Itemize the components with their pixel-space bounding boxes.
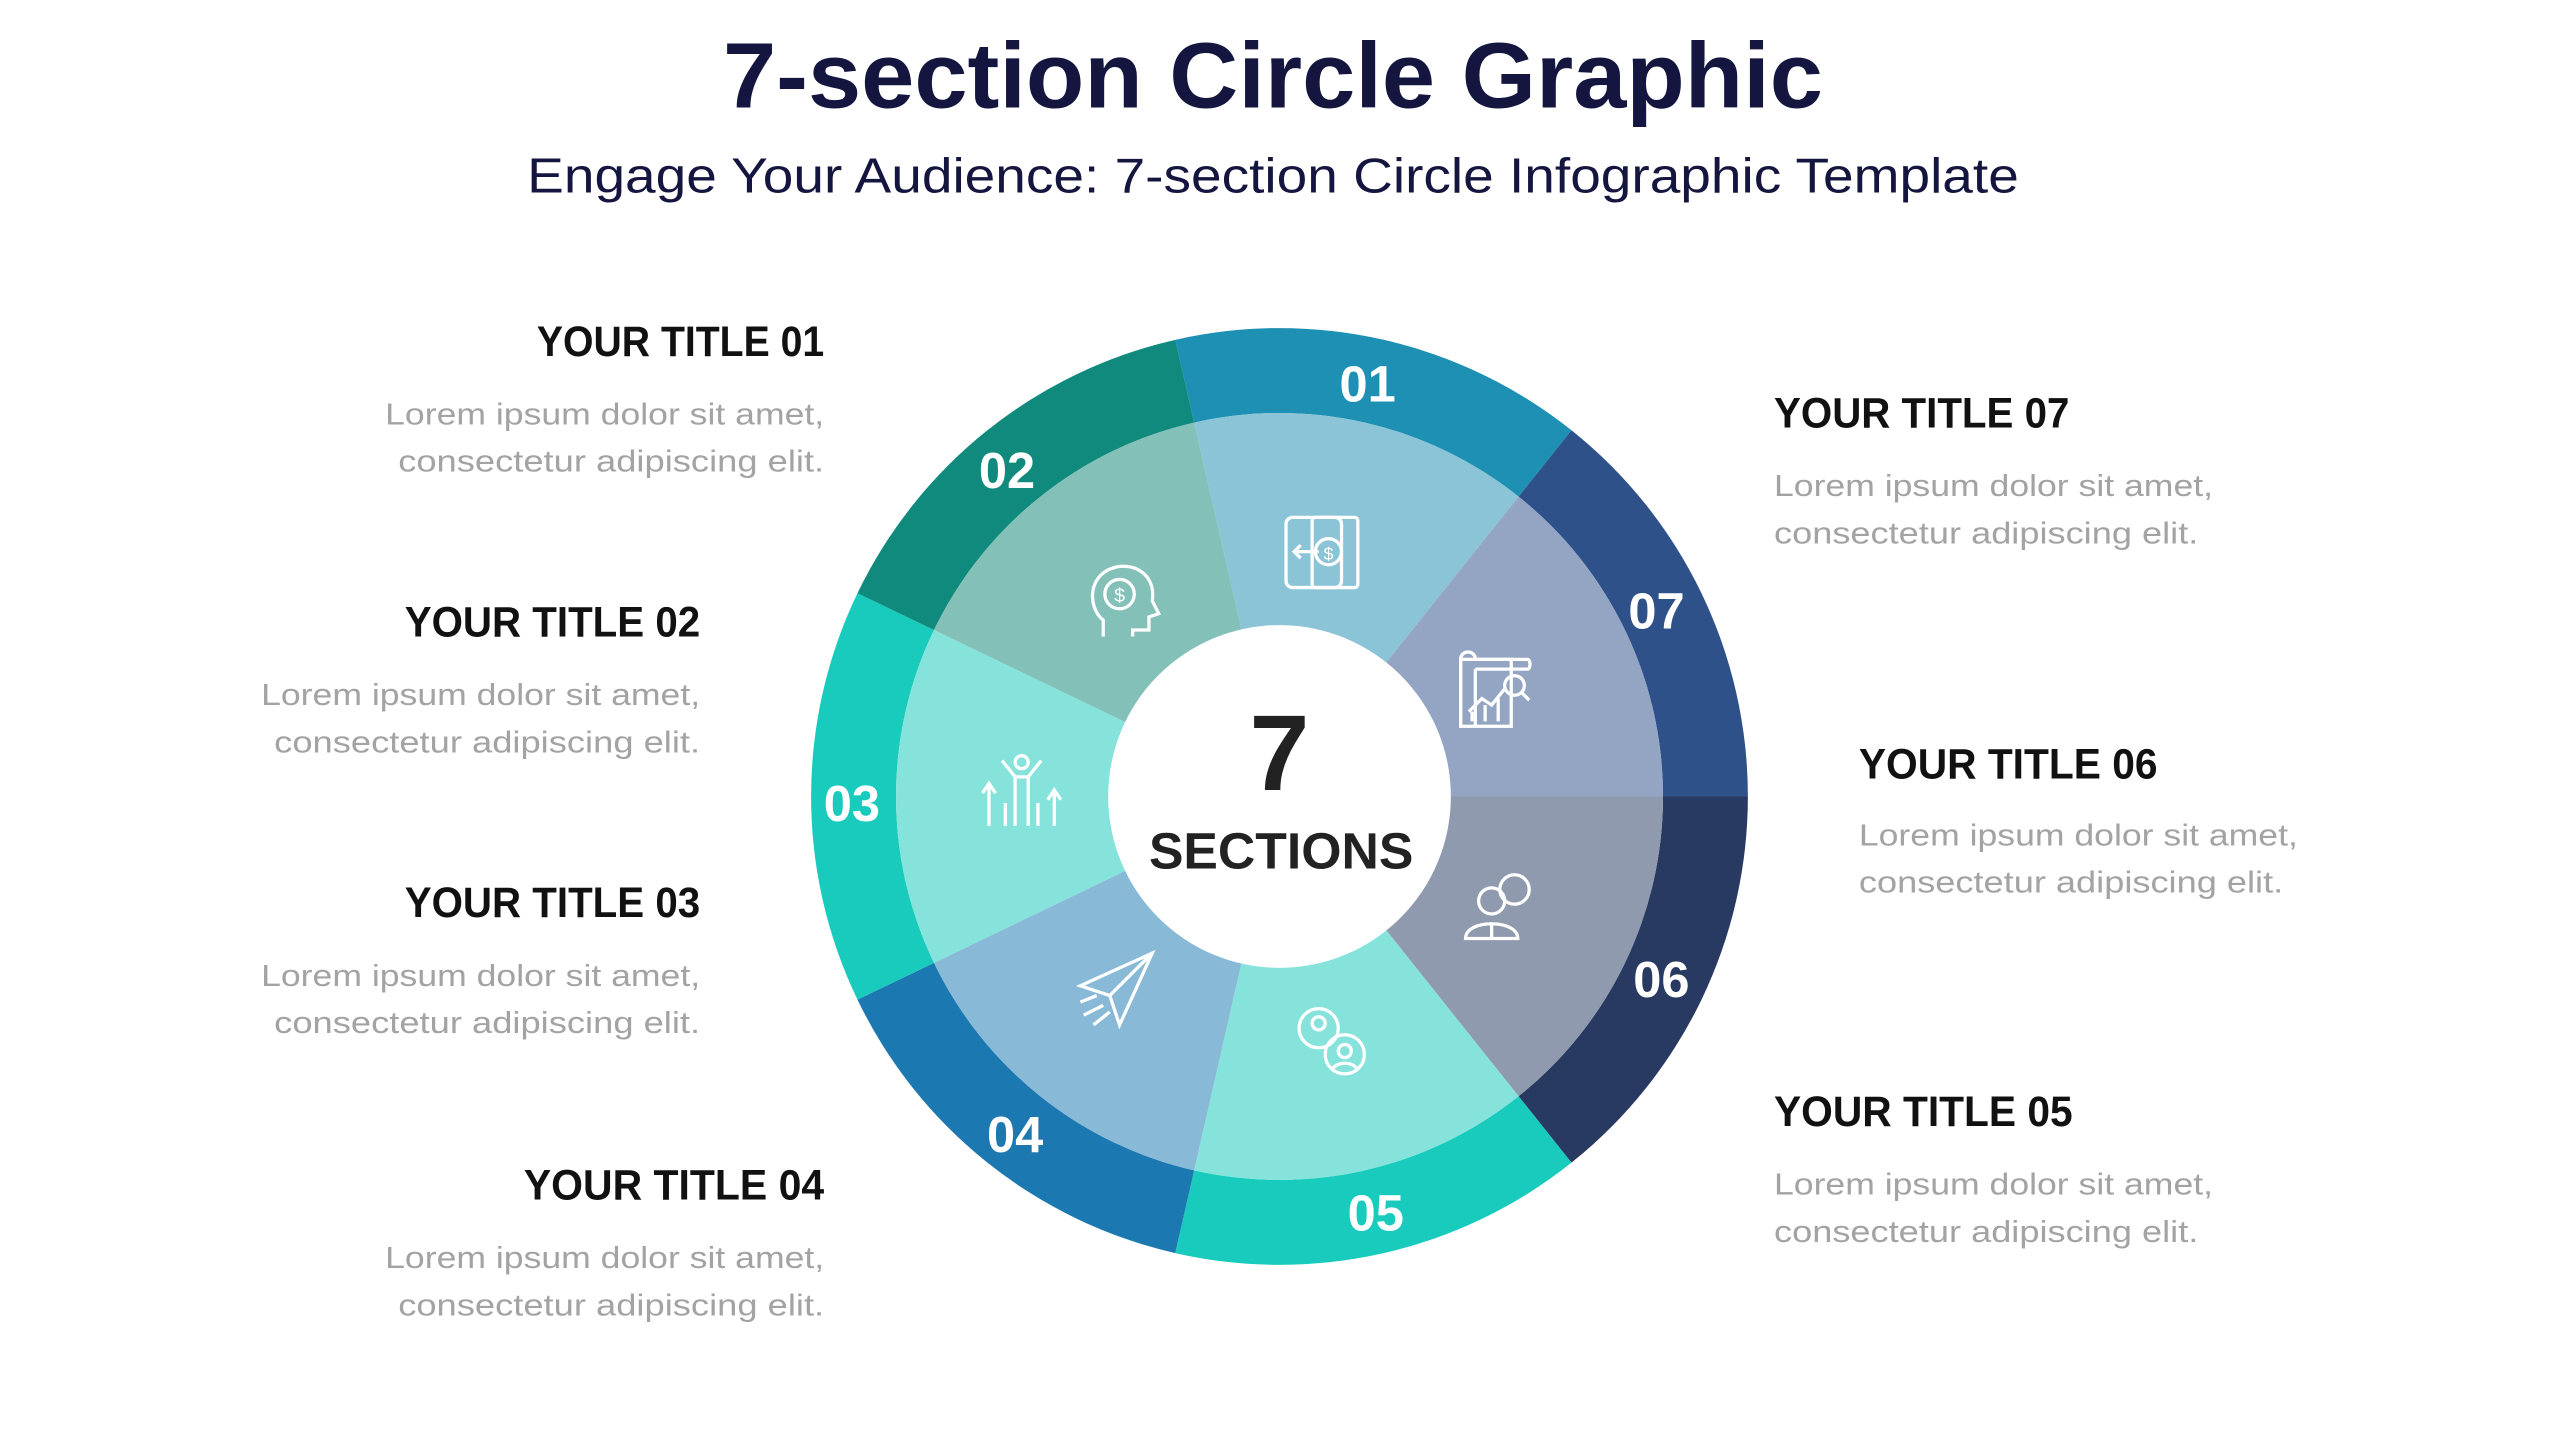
icon: head with dollar xyxy=(1093,566,1159,637)
title 07 block: Lorem ipsum dolor sit amet, xyxy=(1774,468,2213,503)
segment 02 xyxy=(857,340,1280,796)
center circle xyxy=(1108,625,1451,968)
title 02 block: Lorem ipsum dolor sit amet, xyxy=(261,677,700,712)
title 05 block xyxy=(1774,1088,2213,1249)
title 05 block: YOUR TITLE 05 xyxy=(1774,1088,2073,1135)
segment 07 xyxy=(1280,430,1748,796)
title 02 block: YOUR TITLE 02 xyxy=(405,599,700,646)
title 06 block: YOUR TITLE 06 xyxy=(1859,741,2158,788)
center circle: 7 xyxy=(1250,692,1309,813)
section numbers: 04 xyxy=(987,1106,1043,1163)
section numbers: 05 xyxy=(1348,1185,1404,1242)
section numbers: 06 xyxy=(1633,951,1690,1008)
segment 04 xyxy=(857,796,1280,1253)
icon: person with gear xyxy=(1466,875,1529,938)
section numbers: 01 xyxy=(1339,356,1396,413)
title 01 block: YOUR TITLE 01 xyxy=(537,318,824,365)
title 03 block: Lorem ipsum dolor sit amet, xyxy=(261,958,700,993)
segment 05 xyxy=(1175,796,1571,1265)
title 04 block: Lorem ipsum dolor sit amet, xyxy=(385,1240,824,1275)
title 03 block: YOUR TITLE 03 xyxy=(405,879,700,926)
title 02 block: consectetur adipiscing elit. xyxy=(274,724,700,759)
circle chart xyxy=(811,328,1748,1265)
icon: person with arrows xyxy=(982,756,1061,826)
section numbers: 02 xyxy=(979,442,1035,499)
segment 03 xyxy=(811,593,1280,1000)
section numbers xyxy=(824,356,1690,1242)
icon: people target xyxy=(1299,1009,1364,1074)
text block: left titles xyxy=(261,318,825,1322)
title 06 block: consectetur adipiscing elit. xyxy=(1859,865,2283,900)
title 06 block: Lorem ipsum dolor sit amet, xyxy=(1859,817,2298,852)
icon: report chart xyxy=(1461,652,1530,726)
icon: head with dollar: $ xyxy=(1114,585,1125,607)
section numbers: 03 xyxy=(824,775,880,832)
subtitle: Engage Your Audience: 7-section Circle Infographic Template xyxy=(527,150,2019,204)
title 03 block xyxy=(261,879,700,1040)
title 02 block xyxy=(261,599,700,759)
icon: phone payment xyxy=(1286,517,1358,588)
text block: right titles xyxy=(1774,390,2298,1249)
title 01 block: consectetur adipiscing elit. xyxy=(398,444,824,479)
icon: phone payment: $ xyxy=(1323,544,1333,564)
section numbers: 07 xyxy=(1628,582,1685,639)
title 07 block: YOUR TITLE 07 xyxy=(1774,390,2069,437)
title 06 block xyxy=(1859,741,2298,900)
title: 7-section Circle Graphic xyxy=(723,24,1823,128)
segment 06 xyxy=(1280,796,1748,1163)
title 04 block xyxy=(385,1162,825,1322)
center circle: SECTIONS xyxy=(1149,822,1413,879)
icon: paper plane xyxy=(1080,953,1152,1025)
title 01 block: Lorem ipsum dolor sit amet, xyxy=(385,396,824,431)
title 03 block: consectetur adipiscing elit. xyxy=(274,1005,700,1040)
title 01 block xyxy=(385,318,824,479)
title 07 block: consectetur adipiscing elit. xyxy=(1774,515,2198,550)
title 07 block xyxy=(1774,390,2213,550)
title 04 block: YOUR TITLE 04 xyxy=(524,1162,825,1209)
title 05 block: consectetur adipiscing elit. xyxy=(1774,1214,2198,1249)
title 05 block: Lorem ipsum dolor sit amet, xyxy=(1774,1167,2213,1202)
title 04 block: consectetur adipiscing elit. xyxy=(398,1287,824,1322)
segment 01 xyxy=(1175,328,1571,796)
